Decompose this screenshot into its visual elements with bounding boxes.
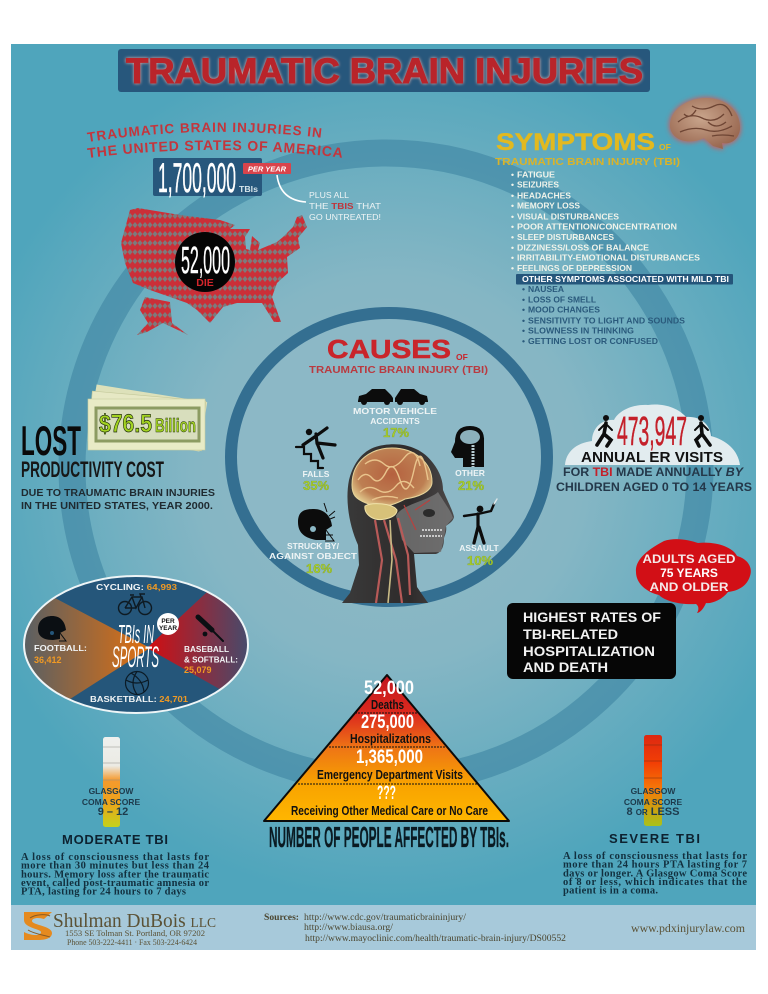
title banner: TRAUMATIC BRAIN INJURIES bbox=[126, 52, 643, 91]
icon: runner left bbox=[597, 415, 612, 446]
tier: hospitalizations bbox=[350, 712, 431, 746]
severe description: days or longer. A Glasgow Coma Score bbox=[563, 868, 747, 879]
icon: basketball bbox=[126, 672, 148, 694]
tier: other care: Receiving Other Medical Care or No Care bbox=[291, 803, 488, 818]
mild symptom list: • bbox=[522, 284, 525, 294]
moderate TBI column bbox=[21, 737, 210, 898]
cause: struck by object: AGAINST OBJECT bbox=[269, 551, 358, 561]
tier: deaths: 52,000 bbox=[364, 678, 414, 699]
untreated note: THE TBIS THAT bbox=[309, 202, 381, 211]
football stat: 36,412 bbox=[34, 655, 62, 665]
symptom list: SEIZURES bbox=[517, 180, 559, 190]
website: www.pdxinjurylaw.com bbox=[631, 921, 746, 935]
causes heading: TRAUMATIC BRAIN INJURY (TBI) bbox=[309, 365, 488, 376]
cause: assault bbox=[459, 499, 500, 568]
symptom list bbox=[511, 169, 700, 273]
mild symptom list: MOOD CHANGES bbox=[528, 305, 600, 315]
ER detail text: FOR TBI MADE ANNUALLY BY bbox=[563, 465, 744, 479]
text: 52,000 bbox=[181, 240, 230, 282]
basketball stat: BASKETBALL: 24,701 bbox=[90, 694, 188, 704]
cycling stat: CYCLING: 64,993 bbox=[96, 582, 177, 592]
speech bubble: older adults: AND OLDER bbox=[650, 580, 729, 594]
cost value: $76.5 bbox=[99, 410, 152, 438]
severe description: of 8 or less, which indicates that the bbox=[563, 877, 747, 888]
mild symptom list: SLOWNESS IN THINKING bbox=[528, 326, 634, 336]
arrow: untreated callout bbox=[277, 175, 306, 202]
untreated note: GO UNTREATED! bbox=[309, 213, 381, 222]
ER detail text bbox=[556, 465, 752, 494]
per year tag bbox=[243, 163, 291, 174]
glasgow score 8 or less: GLASGOW bbox=[631, 786, 676, 796]
gauge: moderate bbox=[103, 737, 120, 827]
severe description: A loss of consciousness that lasts for bbox=[563, 851, 747, 862]
money stack: Billion bbox=[155, 416, 196, 437]
glasgow score 9-12 bbox=[82, 786, 140, 818]
sources: Sources: bbox=[264, 913, 299, 923]
ER visits cloud: 473,947 bbox=[617, 408, 687, 454]
glasgow score 8 or less: COMA SCORE bbox=[624, 797, 682, 807]
symptom list: MEMORY LOSS bbox=[517, 201, 580, 211]
footer bbox=[11, 905, 756, 950]
causes heading: CAUSES bbox=[327, 334, 451, 364]
deaths badge: DIE bbox=[196, 277, 214, 289]
symptom list: FEELINGS OF DEPRESSION bbox=[517, 263, 632, 273]
1,700,000 TBIs counter: 1,700,000 bbox=[158, 154, 236, 201]
speech bubble: older adults: 75 YEARS bbox=[660, 566, 718, 580]
1,700,000 TBIs counter bbox=[153, 154, 262, 201]
baseball stat bbox=[184, 617, 238, 675]
causes heading bbox=[309, 334, 488, 376]
baseball stat: & SOFTBALL: bbox=[184, 654, 238, 664]
symptom list: • bbox=[511, 232, 514, 242]
US statistics heading: TRAUMATIC BRAIN INJURIES IN bbox=[86, 122, 322, 142]
mild symptom list: • bbox=[522, 305, 525, 315]
cause: assault: ASSAULT bbox=[459, 543, 500, 553]
icon: football helmet bbox=[38, 616, 66, 641]
sports panel bbox=[20, 576, 255, 720]
cause: other bbox=[451, 426, 485, 493]
highest rates box: AND DEATH bbox=[523, 660, 608, 675]
mild symptom list: NAUSEA bbox=[528, 284, 564, 294]
tier: deaths bbox=[364, 678, 414, 712]
lost productivity block bbox=[21, 385, 215, 512]
firm name: Shulman DuBois LLC bbox=[53, 910, 216, 932]
cause: struck by object: 16% bbox=[306, 561, 332, 576]
moderate description bbox=[21, 852, 210, 898]
outer ring bbox=[72, 153, 700, 781]
symptoms heading bbox=[495, 129, 680, 168]
sports panel: TBIs IN bbox=[118, 619, 154, 649]
gauge: severe bbox=[644, 735, 662, 826]
symptom list: • bbox=[511, 222, 514, 232]
tier: deaths: Deaths bbox=[371, 697, 404, 712]
symptom list: SLEEP DISTURBANCES bbox=[517, 232, 614, 242]
cycling stat bbox=[96, 582, 177, 614]
sources: http://www.mayoclinic.com/health/traumatic-brain-injury/DS00552 bbox=[305, 934, 566, 944]
symptom list: VISUAL DISTURBANCES bbox=[517, 211, 619, 221]
productivity note bbox=[21, 487, 215, 512]
moderate description: A loss of consciousness that lasts for bbox=[21, 852, 209, 863]
baseball stat: 25,079 bbox=[184, 665, 212, 675]
US statistics heading bbox=[86, 122, 342, 158]
symptom list: FATIGUE bbox=[517, 169, 555, 179]
firm address: Phone 503-222-4411 · Fax 503-224-6424 bbox=[67, 938, 197, 947]
glasgow score 9-12: GLASGOW bbox=[89, 786, 134, 796]
cause: assault: 10% bbox=[467, 553, 493, 568]
basketball stat bbox=[90, 672, 188, 704]
moderate description: more than 30 minutes but less than 24 bbox=[21, 861, 210, 872]
moderate description: PTA, lasting for 24 hours to 7 days bbox=[21, 887, 186, 898]
symptom list: • bbox=[511, 180, 514, 190]
highest rates box: TBI-RELATED bbox=[523, 627, 618, 642]
tier: emergency visits: Emergency Department Visits bbox=[317, 767, 463, 782]
per year badge bbox=[157, 613, 179, 635]
icon: person falling on stairs bbox=[296, 428, 335, 468]
ER caption: ANNUAL ER VISITS bbox=[581, 450, 723, 466]
severe heading: SEVERE TBI bbox=[609, 831, 700, 846]
icon: crashing cars bbox=[358, 389, 428, 405]
glasgow score 9-12: COMA SCORE bbox=[82, 797, 140, 807]
highest rates box: HOSPITALIZATION bbox=[523, 644, 655, 659]
glasgow score 8 or less: 8 OR LESS bbox=[627, 806, 679, 818]
speech bubble: older adults bbox=[636, 539, 751, 613]
symptom list: • bbox=[511, 253, 514, 263]
moderate description: event, called post-traumatic amnesia or bbox=[21, 878, 209, 889]
cause: motor vehicle accidents: MOTOR VEHICLE bbox=[353, 406, 437, 416]
inner causes circle bbox=[231, 313, 547, 601]
symptom list: • bbox=[511, 201, 514, 211]
symptoms heading: SYMPTOMS bbox=[496, 129, 655, 156]
LOST heading: LOST bbox=[21, 417, 81, 464]
productivity note: DUE TO TRAUMATIC BRAIN INJURIES bbox=[21, 487, 215, 499]
per year tag: PER YEAR bbox=[248, 164, 287, 174]
mild symptom list: • bbox=[522, 326, 525, 336]
baseball stat: BASEBALL bbox=[184, 644, 229, 654]
tier: hospitalizations: 275,000 bbox=[361, 712, 414, 733]
per year badge: PER bbox=[161, 618, 175, 625]
mild symptom list: • bbox=[522, 315, 525, 325]
football stat: FOOTBALL: bbox=[34, 643, 87, 653]
money stack bbox=[88, 385, 207, 451]
symptom list: DIZZINESS/LOSS OF BALANCE bbox=[517, 242, 649, 252]
cause: struck by object: STRUCK BY/ bbox=[287, 541, 340, 551]
mild symptom list: SENSITIVITY TO LIGHT AND SOUNDS bbox=[528, 315, 685, 325]
moderate description: hours. Memory loss after the traumatic bbox=[21, 869, 209, 880]
highest rates box bbox=[507, 603, 676, 679]
severe description: more than 24 hours PTA lasting for 7 bbox=[563, 860, 747, 871]
cause: struck by object bbox=[269, 503, 358, 576]
symptoms heading: TRAUMATIC BRAIN INJURY (TBI) bbox=[495, 156, 680, 168]
firm address bbox=[65, 929, 205, 947]
productivity cost heading: PRODUCTIVITY COST bbox=[21, 457, 164, 482]
glasgow score 8 or less bbox=[624, 786, 682, 818]
glasgow score 9-12: 9 – 12 bbox=[98, 806, 128, 818]
sources bbox=[264, 913, 566, 944]
symptom list: • bbox=[511, 211, 514, 221]
untreated note: PLUS ALL bbox=[309, 191, 350, 200]
firm address: 1553 SE Tolman St. Portland, OR 97202 bbox=[65, 929, 205, 938]
icon: head with brain bbox=[451, 426, 484, 467]
head anatomy illustration bbox=[342, 444, 454, 603]
sports title bbox=[112, 619, 159, 674]
mild symptom list: GETTING LOST OR CONFUSED bbox=[528, 336, 658, 346]
US map bbox=[121, 208, 307, 335]
cause: motor vehicle accidents bbox=[353, 389, 437, 440]
untreated note bbox=[309, 191, 381, 222]
speech bubble: older adults: ADULTS AGED bbox=[642, 552, 736, 566]
tier: emergency visits bbox=[317, 747, 463, 782]
sources: http://www.cdc.gov/traumaticbraininjury/ bbox=[304, 913, 466, 923]
symptom list: • bbox=[511, 190, 514, 200]
icon: helmet bbox=[298, 503, 335, 541]
symptoms panel bbox=[495, 129, 733, 346]
US statistics heading: THE UNITED STATES OF AMERICA bbox=[87, 140, 342, 158]
icon: runner right bbox=[695, 415, 710, 446]
cause: other: OTHER bbox=[455, 468, 485, 478]
moderate heading: MODERATE TBI bbox=[62, 832, 168, 847]
mild symptom list: • bbox=[522, 294, 525, 304]
ER visits cloud bbox=[556, 405, 752, 494]
1,700,000 TBIs counter: TBIs bbox=[239, 184, 258, 194]
tier: emergency visits: 1,365,000 bbox=[356, 747, 423, 768]
tier: hospitalizations: Hospitalizations bbox=[350, 731, 431, 746]
productivity note: IN THE UNITED STATES, YEAR 2000. bbox=[21, 500, 213, 512]
sports panel: SPORTS bbox=[112, 641, 159, 674]
symptom list: • bbox=[511, 242, 514, 252]
tier: other care bbox=[291, 783, 488, 818]
mild symptom list: LOSS OF SMELL bbox=[528, 294, 596, 304]
cause: falls: FALLS bbox=[303, 469, 330, 479]
symptom list: POOR ATTENTION/CONCENTRATION bbox=[517, 222, 677, 232]
logo mark bbox=[24, 912, 52, 940]
mild TBI bar: OTHER SYMPTOMS ASSOCIATED WITH MILD TBI bbox=[522, 274, 729, 284]
tier: other care: ??? bbox=[377, 783, 396, 804]
cause: falls bbox=[296, 428, 335, 493]
per year badge: YEAR bbox=[159, 625, 177, 632]
pyramid chart bbox=[264, 675, 509, 821]
severe description bbox=[563, 851, 747, 897]
causes heading: OF bbox=[456, 352, 468, 362]
mild symptom list: • bbox=[522, 336, 525, 346]
mild symptom list bbox=[522, 284, 685, 346]
symptoms heading: OF bbox=[659, 142, 671, 152]
severe TBI column bbox=[563, 735, 747, 897]
severe description: patient is in a coma. bbox=[563, 886, 658, 897]
icon: person with raised arm bbox=[464, 499, 497, 543]
cause: other: 21% bbox=[458, 478, 484, 493]
ER detail text: CHILDREN AGED 0 TO 14 YEARS bbox=[556, 480, 752, 494]
symptom list: • bbox=[511, 263, 514, 273]
symptom list: IRRITABILITY-EMOTIONAL DISTURBANCES bbox=[517, 253, 700, 263]
deaths badge bbox=[175, 232, 235, 292]
icon: brain illustration bbox=[669, 97, 741, 150]
symptom list: HEADACHES bbox=[517, 190, 571, 200]
icon: baseball bat bbox=[198, 617, 223, 641]
cause: falls: 35% bbox=[303, 478, 329, 493]
sources: http://www.biausa.org/ bbox=[304, 923, 393, 933]
football stat bbox=[34, 616, 87, 665]
icon: bicycle bbox=[118, 594, 152, 614]
symptom list: • bbox=[511, 169, 514, 179]
cause: motor vehicle accidents: 17% bbox=[383, 425, 409, 440]
highest rates box: HIGHEST RATES OF bbox=[523, 610, 661, 625]
cause: motor vehicle accidents: ACCIDENTS bbox=[370, 416, 420, 426]
